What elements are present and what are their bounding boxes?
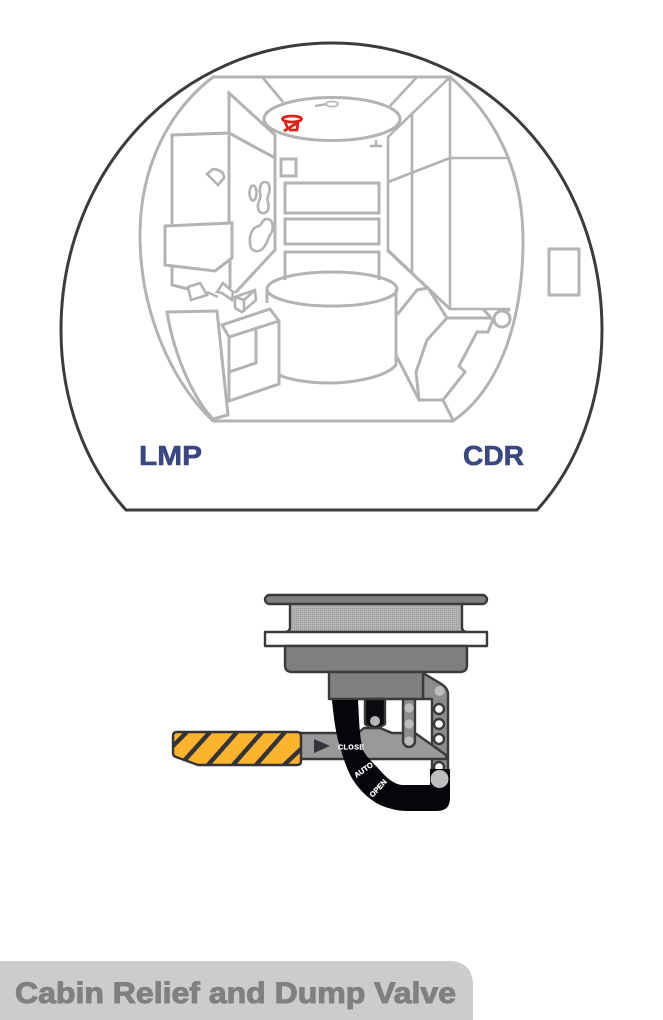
footer title bar	[0, 961, 473, 1020]
wall details	[207, 169, 273, 251]
window outline	[140, 77, 523, 421]
left lower panel	[165, 223, 232, 289]
back wall panels	[281, 159, 379, 280]
left wall and door	[172, 93, 275, 293]
black selector arc	[332, 700, 450, 811]
linkage arm	[403, 699, 415, 747]
lever plate	[300, 728, 446, 759]
title: Cabin Relief and Dump Valve	[15, 977, 456, 1010]
right wall lines	[263, 77, 510, 309]
handle grip	[172, 732, 302, 766]
selector label: OPEN: OPEN	[368, 777, 389, 799]
ceiling hatch	[264, 98, 400, 140]
mounting block	[329, 672, 423, 699]
valve diagram	[172, 595, 487, 811]
selector label: AUTO: AUTO	[352, 760, 375, 780]
arrow marker	[314, 739, 330, 753]
label: LMP: LMP	[139, 440, 202, 471]
label: CDR: CDR	[463, 440, 524, 471]
lever slot	[365, 699, 385, 728]
hatch post	[370, 140, 382, 146]
side window	[549, 249, 579, 295]
capsule outline	[61, 43, 602, 510]
right console	[387, 250, 510, 420]
selector label: CLOSE: CLOSE	[338, 744, 364, 752]
white flange	[265, 632, 487, 646]
mesh body	[285, 604, 467, 632]
front left panel	[167, 311, 228, 419]
cylinder	[267, 289, 396, 383]
cabin interior view	[140, 77, 579, 421]
side bracket	[423, 673, 448, 772]
top flange	[265, 595, 487, 604]
storage box	[222, 309, 279, 401]
small blocks	[188, 283, 256, 312]
pivot knob	[430, 770, 448, 788]
lower housing	[285, 646, 467, 672]
hatch handle	[315, 104, 327, 106]
icon: valve location	[282, 116, 302, 131]
